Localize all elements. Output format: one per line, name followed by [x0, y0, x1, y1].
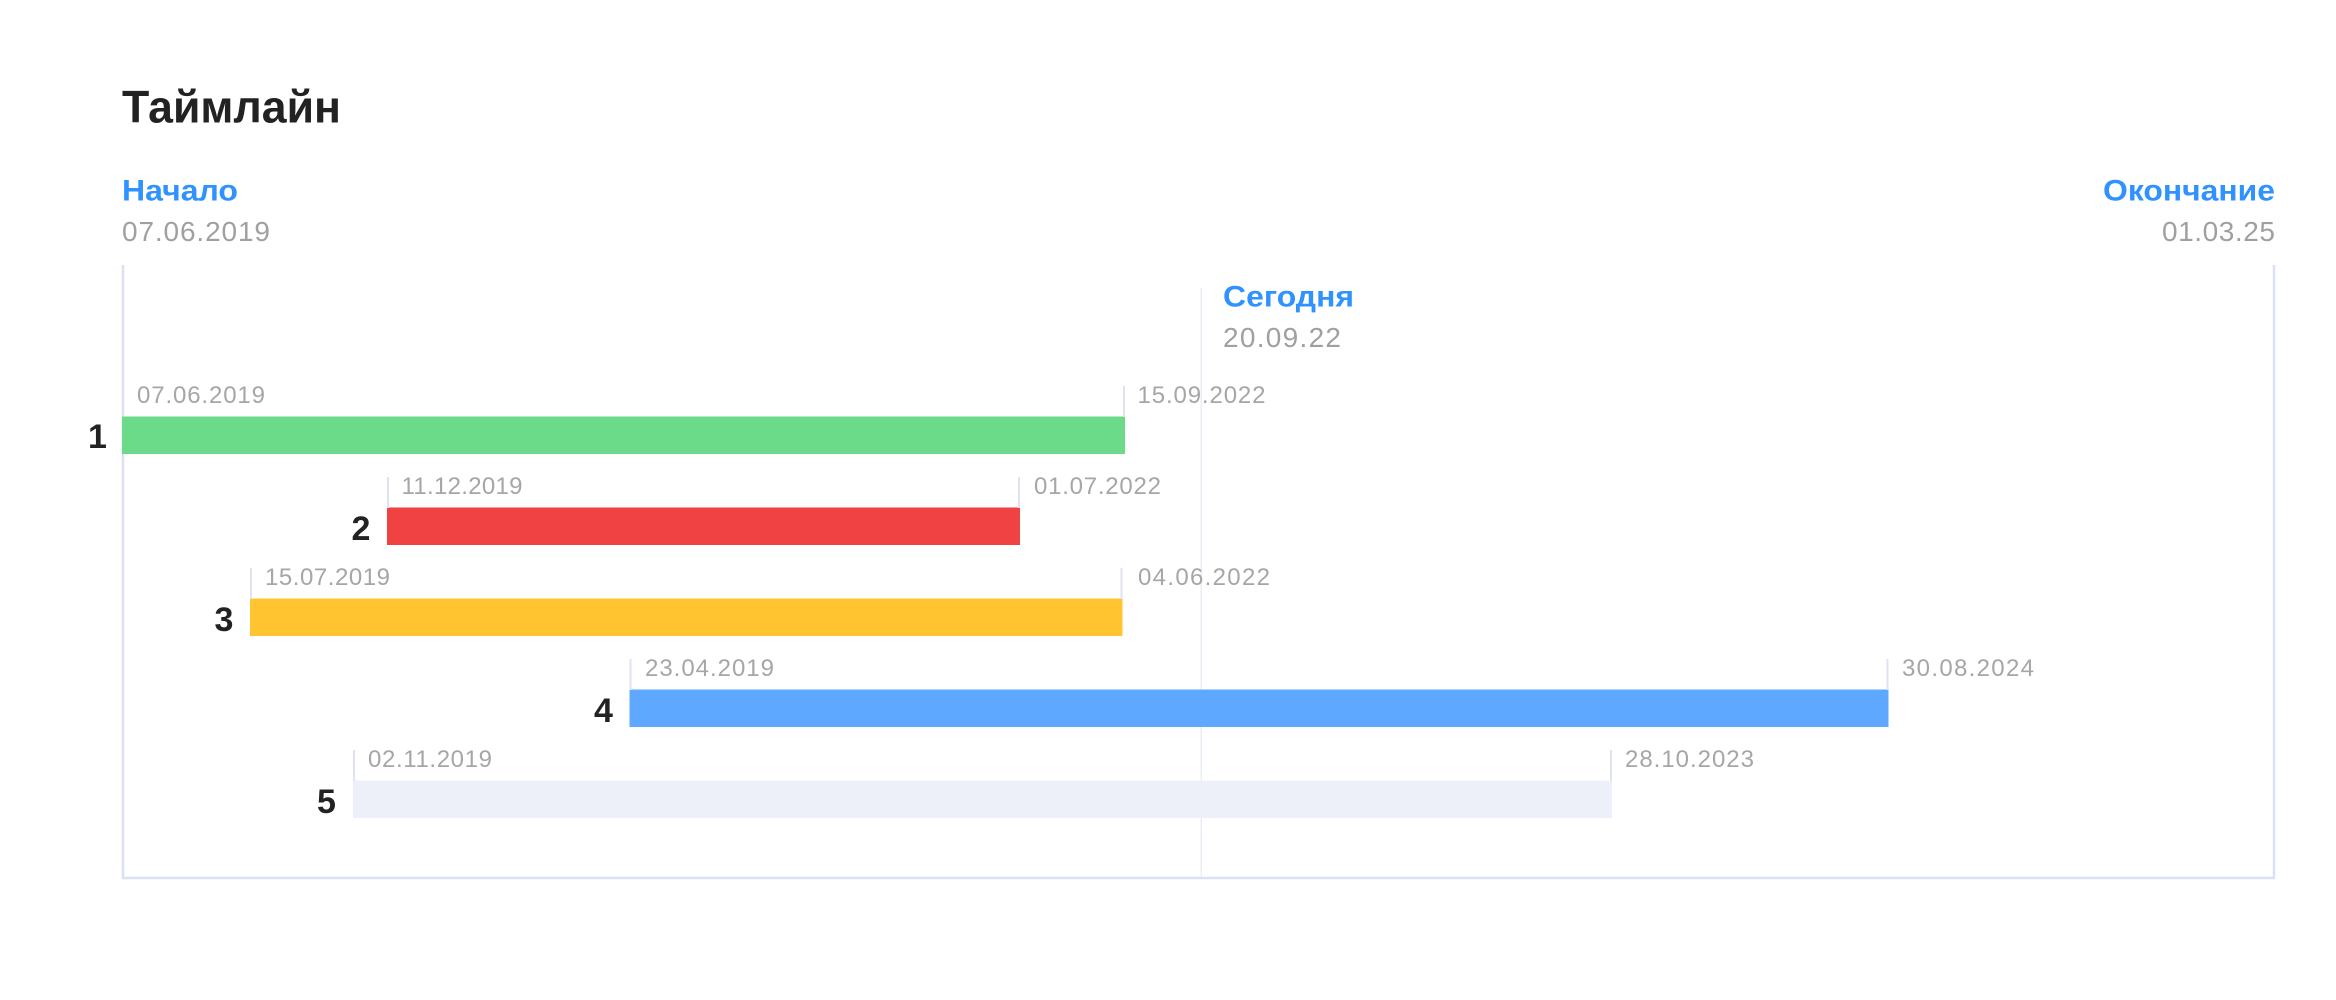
title: Таймлайн [122, 82, 341, 132]
row 5: 28.10.2023 [1625, 746, 1754, 773]
today label: 20.09.22 [1223, 322, 1341, 353]
end label: Окончание [2103, 174, 2275, 208]
row 4: 23.04.2019 [645, 655, 774, 682]
today label [1223, 280, 1354, 353]
end label: 01.03.25 [2162, 216, 2275, 247]
start label: 07.06.2019 [122, 216, 270, 247]
row 1: 15.09.2022 [1138, 382, 1266, 409]
row 3: 04.06.2022 [1138, 564, 1270, 591]
row 4: 4 [594, 692, 613, 730]
row 3: 3 [214, 601, 233, 639]
today marker line [1200, 288, 1202, 877]
chart frame [123, 265, 2274, 878]
row 4: 30.08.2024 [1902, 655, 2034, 682]
start label: Начало [122, 174, 238, 208]
row 1 [88, 382, 1266, 456]
start label [122, 174, 270, 247]
end label [2103, 174, 2275, 247]
row 3 [214, 564, 1270, 639]
row 2 [352, 473, 1161, 548]
row 4 [594, 655, 2034, 730]
row 2: 2 [352, 510, 370, 548]
row 3: 15.07.2019 [265, 564, 390, 591]
row 1: 07.06.2019 [137, 382, 265, 409]
row 2: 11.12.2019 [402, 473, 522, 500]
row 5: 5 [317, 783, 336, 821]
row 5 [317, 746, 1754, 821]
today label: Сегодня [1223, 280, 1354, 314]
row 1: 1 [88, 418, 107, 456]
row 5: 02.11.2019 [368, 746, 492, 773]
row 2: 01.07.2022 [1034, 473, 1161, 500]
